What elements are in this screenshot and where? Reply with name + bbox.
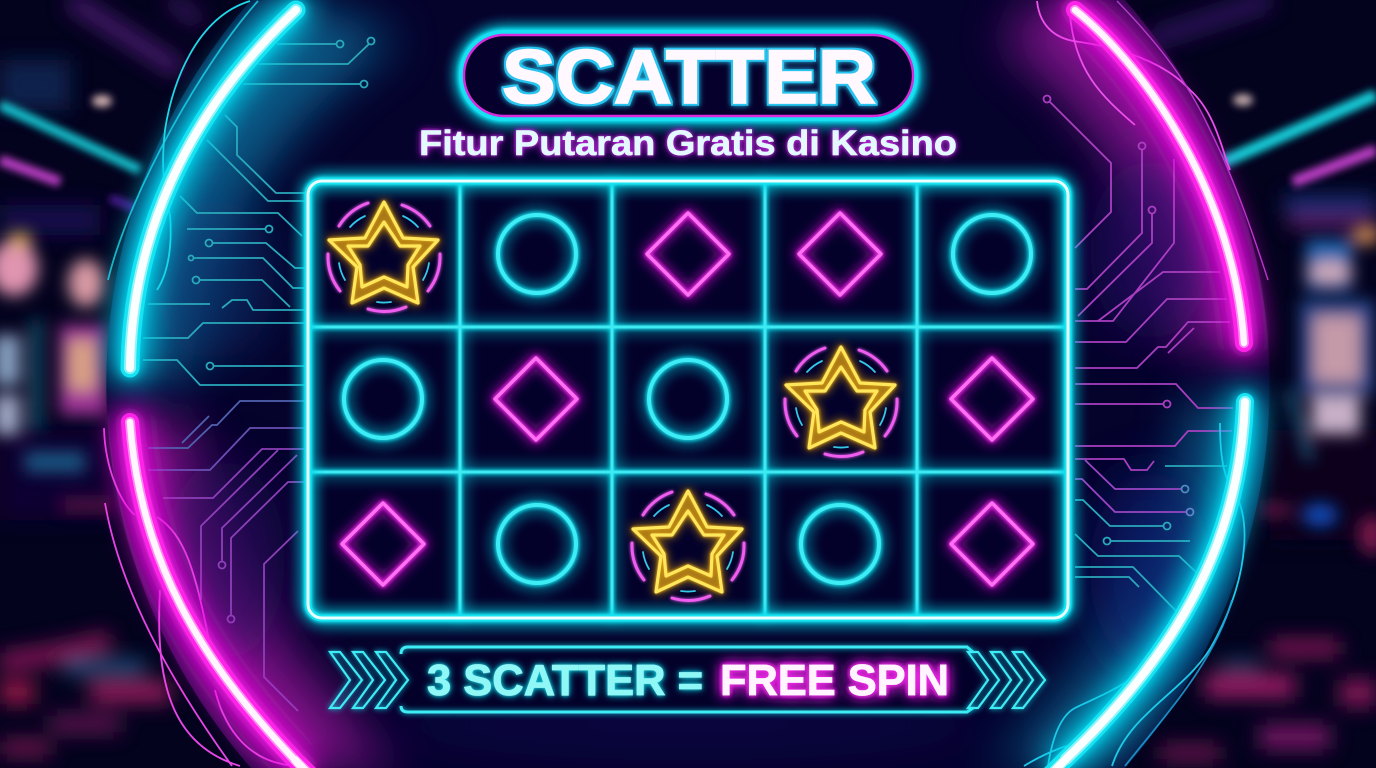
banner text: free spin: FREE SPIN	[720, 656, 949, 705]
right chevron arrows	[968, 652, 1045, 708]
thin wires: cyan upper left	[108, 1, 258, 290]
banner frame lines	[401, 647, 973, 712]
cyan circle symbols	[344, 215, 1031, 583]
title pill	[461, 32, 916, 120]
bottom banner	[330, 647, 1045, 712]
thin wires: magenta upper right	[1037, 1, 1268, 280]
circuit traces: lower left	[148, 401, 306, 711]
title: SCATTER: SCATTER	[502, 35, 876, 120]
scatter star: row 3 column 3	[632, 491, 744, 600]
thin wires: magenta lower left	[104, 428, 300, 766]
neon arc: upper right magenta	[1075, 10, 1244, 343]
magenta diamond symbols	[342, 213, 1033, 585]
thin wires: cyan lower right	[1024, 423, 1245, 766]
scatter star: row 1 column 1	[328, 202, 440, 311]
neon arc: lower left magenta	[130, 422, 316, 768]
neon arc: lower right cyan	[1044, 402, 1245, 768]
subtitle: Fitur Putaran Gratis di Kasino	[419, 124, 957, 163]
left chevron arrows	[330, 652, 408, 708]
neon arc: upper left cyan	[130, 10, 296, 368]
slot grid panel	[308, 181, 1068, 618]
circuit traces: upper right	[1044, 96, 1233, 470]
banner text: 3 scatter equals: 3 SCATTER =	[427, 656, 703, 705]
circuit traces: upper left	[143, 38, 374, 385]
scatter star: row 2 column 4	[785, 347, 897, 456]
circuit traces: lower right	[1075, 460, 1227, 615]
